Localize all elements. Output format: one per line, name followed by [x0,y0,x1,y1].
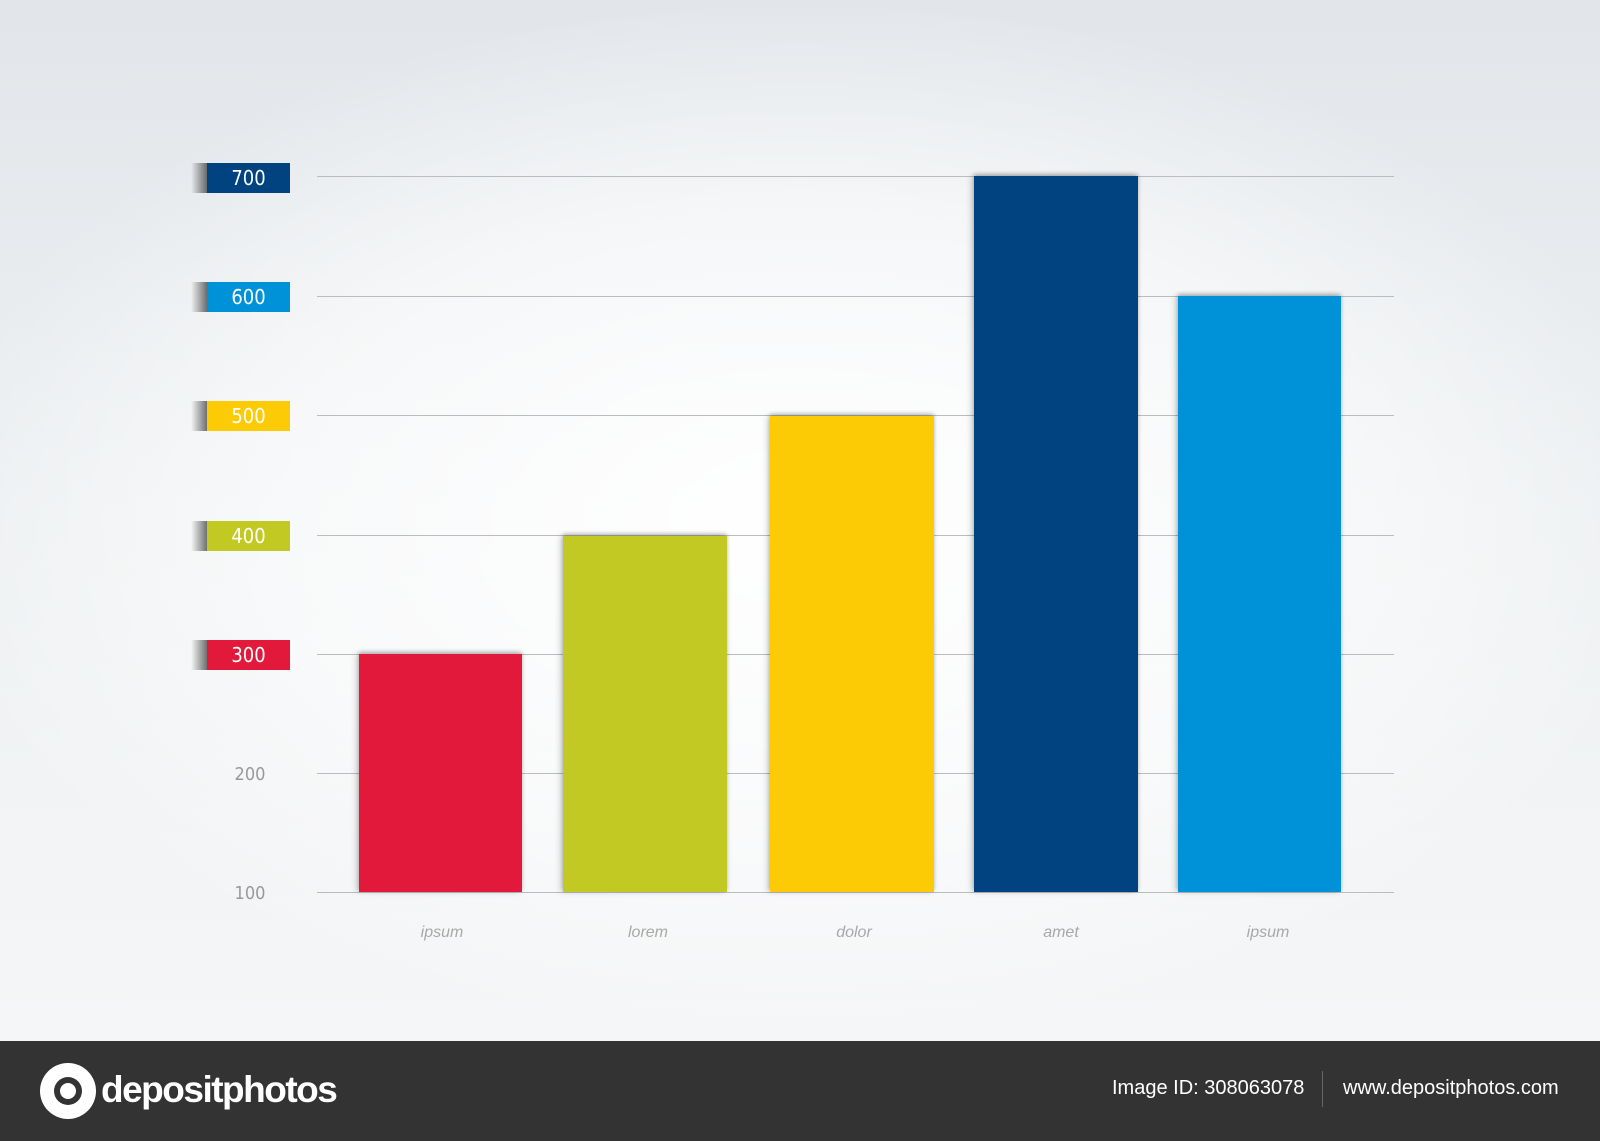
icon: camera [40,1063,96,1119]
logo [40,1063,336,1119]
bar: ipsum 2 [1178,296,1341,892]
bar: ipsum [359,654,522,892]
website url: www.depositphotos.com [1343,1077,1559,1099]
y-axis label 700 [207,163,290,193]
y-axis label 200: 200 [235,764,265,785]
y-axis label 300: 300 [231,643,266,667]
footer bar [0,1041,1600,1141]
y-axis label 700: 700 [231,166,266,190]
y-axis label 500 [207,401,290,431]
category label lorem: lorem [628,924,668,941]
bar: dolor [770,416,934,892]
y-axis label 400: 400 [231,524,266,548]
y-axis label 600: 600 [231,285,266,309]
logo text: depositphotos [101,1069,336,1110]
image id: Image ID: 308063078 [1112,1077,1304,1099]
y-axis label 300 [207,640,290,670]
category label dolor: dolor [836,924,872,941]
y-axis label 600 [207,282,290,312]
y-axis label 400 [207,521,290,551]
category label amet: amet [1043,924,1079,941]
y-axis label 100: 100 [235,883,265,904]
bar: amet [974,176,1138,892]
bar: lorem [563,536,727,892]
category label ipsum: ipsum [1247,924,1289,941]
category label ipsum: ipsum [421,924,463,941]
y-axis label 500: 500 [231,404,266,428]
